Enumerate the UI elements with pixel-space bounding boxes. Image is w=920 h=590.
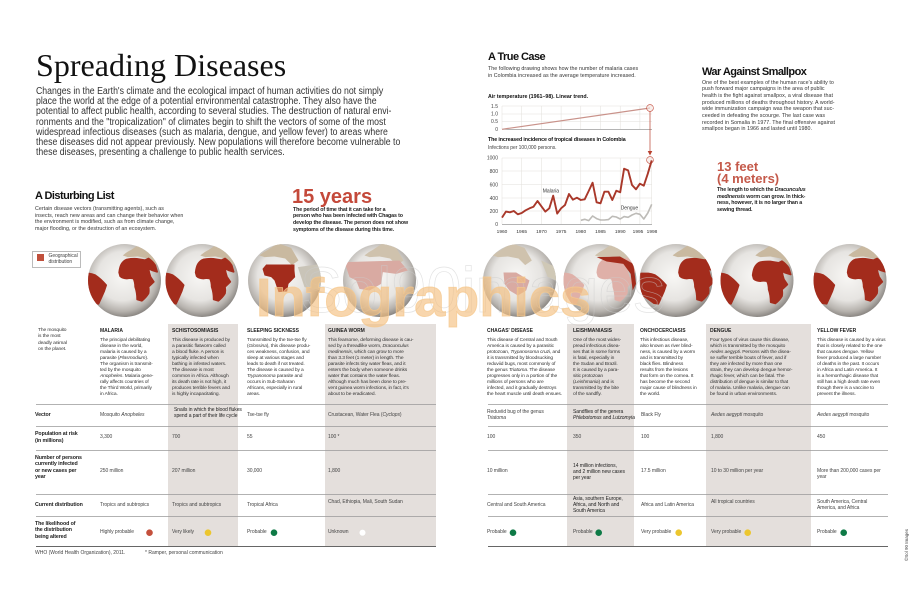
yellow fever infected: More than 200,000 cases per (817, 468, 881, 474)
disease name: SLEEPING SICKNESS (247, 328, 299, 334)
schistosomiasis likelihood: Very likely (172, 529, 194, 535)
description: the genus Triatoma. The disease (487, 368, 555, 373)
description: medinensis, which can grow to more (328, 350, 404, 355)
text: war against smallpox: One of the best examples of the human race's ability to (702, 80, 834, 86)
callout text (717, 187, 806, 213)
chagas vector (487, 409, 544, 421)
description: progresses only in a portion of the (487, 374, 557, 379)
description: the world. (640, 392, 660, 397)
callout figure (717, 159, 779, 186)
description: of the sandfly. (573, 392, 602, 397)
leishmaniasis distribution: Africa, and North and (573, 502, 619, 508)
description: the Third World, primarily (100, 386, 152, 391)
description: Aedes aegypti. Persons with the disea- (710, 350, 791, 355)
disease name: GUINEA WORM (328, 328, 365, 334)
description (710, 338, 792, 397)
row: likelihood values (100, 529, 890, 537)
malaria distribution: Tropics and subtropics (100, 502, 149, 508)
description: common in Africa. Although (172, 374, 229, 379)
sleeping sickness distribution: Tropical Africa (247, 502, 278, 508)
description: about to be eradicated. (328, 392, 376, 397)
description: Anopheles. Malaria gene- (100, 374, 153, 379)
leishmaniasis distribution: Asia, southern Europe, (573, 496, 623, 502)
description: is highly incapacitating. (172, 392, 220, 397)
leishmaniasis infected: per year (573, 475, 591, 481)
description: black flies. Blindness (640, 362, 683, 367)
onchocerciasis likelihood: Very probable (641, 529, 671, 535)
globe: schistosomiasis (166, 244, 238, 317)
description: rally affects countries of (100, 380, 149, 385)
description: Transmitted by the tse-tse fly (247, 338, 307, 343)
disease name: ONCHOCERCIASIS (640, 328, 686, 334)
description: parasite (Plasmodium). (100, 356, 148, 361)
description: leads to death if not treated. (247, 362, 305, 367)
chart: temperature and disease incidence: 1980 (575, 229, 586, 235)
chart title: air temperature: Air temperature (1961–98). Linear trend. (488, 94, 588, 100)
schistosomiasis infected: 207 million (172, 468, 195, 474)
callout text: medinensis worm can grow. In thick- (717, 194, 805, 200)
globe: leishmaniasis (558, 243, 636, 317)
description: se suffer terrible bouts of fever, and if (710, 356, 786, 361)
mosquito note: The mosquito (38, 328, 66, 333)
panel: malaria (100, 328, 154, 397)
description: strain, they can develop dengue hemor- (710, 368, 792, 373)
globe: onchocerciasis (640, 243, 717, 317)
dengue infected: 10 to 30 million per year (711, 468, 763, 474)
chart: temperature and disease incidence: 0.5 (491, 119, 498, 125)
description (817, 338, 886, 397)
row label: vector: Vector (35, 412, 51, 418)
chart: temperature and disease incidence: 1.0 (491, 112, 498, 118)
legend label: distribution (48, 259, 72, 265)
leishmaniasis population: 350 (573, 434, 581, 440)
description: be found in urban environments. (710, 392, 777, 397)
chart: temperature and disease incidence: 600 (490, 182, 498, 188)
intro text: Changes in the Earth's climate and the ecological impact of human activities do not simply (36, 86, 383, 97)
row: population values (100, 434, 890, 442)
description: infected, and it gradually destroys (487, 386, 556, 391)
title: Spreading Diseases (36, 47, 286, 83)
malaria population: 3,300 (100, 434, 112, 440)
intro text (36, 86, 400, 158)
chart: temperature and disease incidence: 1000 (487, 156, 498, 162)
footnote: * Ramper, personal communication (145, 550, 223, 556)
callout text: develop the disease. The person does not show (293, 220, 408, 226)
description: that form on the cornea. It (640, 374, 693, 379)
text: war against smallpox: ceeded in defeating the scourge. The last case was (702, 113, 825, 119)
disease name: MALARIA (100, 328, 123, 334)
description: disease in the world, (100, 344, 142, 349)
globe: chagas disease (483, 243, 556, 317)
description: Africans, especially in rural (247, 386, 302, 391)
chart: temperature and disease incidence: 1985 (595, 229, 606, 235)
panel: guinea worm (328, 328, 414, 397)
yellow fever infected: year (817, 474, 827, 480)
description: occurs in Sub-Saharan (247, 380, 295, 385)
text: war against smallpox: produced millions of deaths throughout history. A world- (702, 100, 835, 106)
description: is a hemorrhagic disease that (817, 374, 878, 379)
description (487, 338, 562, 397)
chart: temperature and disease incidence: 400 (490, 196, 498, 202)
text: a disturbing list (35, 206, 183, 232)
description: typically infected when (172, 356, 219, 361)
malaria infected: 250 million (100, 468, 123, 474)
globes (88, 244, 886, 317)
chart: temperature and disease incidence: 1970 (536, 229, 547, 235)
callout text (293, 206, 408, 233)
guinea worm distribution: Chad, Ethiopia, Mali, South Sudan (328, 499, 403, 505)
description: (Leishmania) and is (573, 380, 614, 385)
description: malaria is caused by a (100, 350, 146, 355)
description (247, 338, 310, 397)
description: that is closely related to the one (817, 344, 882, 349)
callout figure: 13 feet (717, 159, 758, 174)
panel: yellow fever (817, 328, 886, 397)
onchocerciasis infected: 17.5 million (641, 468, 666, 474)
text: a disturbing list: the environment is modified, such as from climate change, (35, 219, 174, 225)
schistosomiasis population: 700 (172, 434, 180, 440)
text: a disturbing list: insects, reach new areas and can change their behavior when (35, 213, 183, 219)
row label: number of persons: or new cases per (35, 468, 76, 474)
description: a blood fluke. A person is (172, 350, 224, 355)
onchocerciasis vector: Black Fly (641, 412, 661, 418)
leishmaniasis distribution: South America (573, 508, 605, 514)
row label: population at risk (35, 431, 78, 444)
description: sed by a threadlike worm, Dracunculus (328, 344, 409, 349)
description: has become the second (640, 380, 690, 385)
description: sitic protozoan (573, 374, 603, 379)
callout figure: 15 years (292, 186, 372, 208)
description: vent guinea worm infections, in fact, it's (328, 386, 409, 391)
schistosomiasis vector (174, 407, 242, 419)
description: protozoan, Trypanosoma cruzi, and (487, 350, 560, 355)
description: still has a high death rate even (817, 380, 880, 385)
description (328, 338, 414, 397)
row label: population at risk: (in millions) (35, 438, 63, 444)
legend swatch (36, 254, 44, 261)
panel: schistosomiasis (172, 328, 230, 397)
mosquito note: deadly animal (38, 341, 67, 346)
description: major cause of blindness in (640, 386, 697, 391)
text: a true case: The following drawing shows how the number of malaria cases (488, 66, 638, 72)
dengue likelihood: Very probable (711, 529, 741, 535)
description: ces weakness, confusion, and (247, 350, 309, 355)
text: war against smallpox: wide immunization campaign was the weapon that suc- (702, 106, 834, 112)
row: infected values (100, 463, 890, 483)
description: ses that in some forms (573, 350, 620, 355)
legend label: Geographical (48, 253, 78, 259)
leishmaniasis distribution (573, 496, 623, 514)
intro text: place the world at the edge of a potential environmental catastrophe. They also have the (36, 96, 377, 107)
globe: sleeping sickness (248, 243, 321, 317)
intro text: these diseases did not appear previously. New populations will therefore become vulnerable to (36, 137, 400, 148)
description: produces terrible fevers and (172, 386, 230, 391)
callout text: The period of time that it can take for a (293, 206, 386, 212)
row label: number of persons: year (35, 474, 46, 480)
description: This disease is caused by a virus (817, 338, 885, 343)
chart: temperature and disease incidence: Dengue (621, 206, 638, 212)
panel: dengue (710, 328, 792, 397)
description: Four types of virus cause this disease, (710, 338, 789, 343)
chart: temperature and disease incidence: 1975 (556, 229, 567, 235)
description: though there is a vaccine to (817, 386, 874, 391)
onchocerciasis distribution: Africa and Latin America (641, 502, 694, 508)
description: enters the body when someone drinks (328, 368, 407, 373)
disease name: LEISHMANIASIS (573, 328, 612, 334)
watermark: Sol90images (300, 254, 665, 326)
text: war against smallpox: smallpox began in 1966 and lasted until 1980. (702, 126, 812, 132)
schistosomiasis distribution: Tropics and subtropics (172, 502, 221, 508)
yellow fever likelihood: Probable (817, 529, 837, 535)
chagas vector: Triatoma (487, 415, 506, 421)
dengue distribution: All tropical countries (711, 499, 755, 505)
globe: malaria (88, 244, 161, 317)
sleeping sickness vector: Tse-tse fly (247, 412, 269, 418)
guinea worm vector: Crustacean, Water Flea (Cyclops) (328, 412, 402, 418)
sleeping sickness population: 55 (247, 434, 252, 440)
description: it is transmitted by bloodsucking (487, 356, 553, 361)
description: ted by the mosquito (100, 368, 141, 373)
description: the Sudan and Brazil. (573, 362, 618, 367)
chagas population: 100 (487, 434, 495, 440)
text: a true case: in Colombia increased as the average temperature increased. (488, 73, 636, 79)
callout text: ness, however, it is no larger than a (717, 200, 802, 206)
legend: geographical distribution (32, 251, 81, 268)
row label: likelihood: The likelihood of (35, 521, 75, 527)
row label: current distribution: Current distribution (35, 502, 83, 508)
description: and is transmitted by (640, 356, 683, 361)
yellow fever population: 450 (817, 434, 825, 440)
chart: temperature and disease incidence: Malaria (543, 188, 559, 194)
text: a disturbing list: major flooding, or the destruction of an ecosystem. (35, 226, 156, 232)
description: the heart muscle until death ensues. (487, 392, 562, 397)
row label: likelihood (35, 521, 76, 540)
description: reduviid bugs, most commonly of (487, 362, 555, 367)
dengue population: 1,800 (711, 434, 723, 440)
panel: chagas disease (487, 328, 562, 397)
description: its death rate is not high, it (172, 380, 226, 385)
yellow fever infected (817, 468, 881, 480)
leishmaniasis vector (573, 409, 635, 421)
description: than 3.3 feet (1 meter) in length. The (328, 356, 404, 361)
text: war against smallpox (702, 80, 835, 132)
chart: temperature and disease incidence: 1998 (647, 229, 658, 235)
globe: dengue (720, 244, 794, 317)
leishmaniasis vector: Sandflies of the genera (573, 409, 623, 415)
description: Although much has been done to pre- (328, 380, 406, 385)
description: transmitted by the bite (573, 386, 619, 391)
description: This fearsome, deforming disease is cau- (328, 338, 413, 343)
description: areas. (247, 392, 260, 397)
description: rhagic fever, which can be fatal. The (710, 374, 785, 379)
chart: temperature and disease incidence: 1960 (497, 229, 508, 235)
chart title: tropical diseases: The increased incidence of tropical diseases in Colombia (488, 136, 626, 142)
yellow fever vector: Aedes aegypti mosquito (817, 412, 869, 418)
description: water that contains the water fleas. (328, 374, 400, 379)
sleeping sickness likelihood: Probable (247, 529, 267, 535)
watermark: Infographics (256, 268, 591, 328)
description: America is caused by a parasitic (487, 344, 554, 349)
disease name: YELLOW FEVER (817, 328, 856, 334)
legend label (48, 253, 78, 265)
intro text: ronments and the "tropicalization" of climates begin to shift the vectors of some of the most (36, 117, 386, 128)
description: parasite infects tiny water fleas, and it (328, 362, 405, 367)
description: This infectious disease, (640, 338, 688, 343)
callout text: The length to which the Dracunculus (717, 187, 806, 193)
description: of malaria. Unlike malaria, dengue can (710, 386, 790, 391)
heading: war against smallpox: War Against Smallpox (702, 66, 806, 78)
description: The disease is caused by a (247, 368, 304, 373)
description: The disease is most (172, 368, 214, 373)
disease name: CHAGAS' DISEASE (487, 328, 533, 334)
globe: yellow fever (809, 243, 887, 317)
description: sleep at various stages and (247, 356, 304, 361)
description: which is transmitted by the mosquito (710, 344, 785, 349)
chart: temperature and disease incidence: 1990 (615, 229, 626, 235)
source note: WHO (World Health Organization), 2011. (35, 550, 125, 556)
row: vector values (100, 407, 870, 421)
panel: onchocerciasis (640, 328, 697, 397)
guinea worm likelihood: Unknown (328, 529, 348, 535)
chagas distribution: Central and South America (487, 502, 546, 508)
disease name: SCHISTOSOMIASIS (172, 328, 218, 334)
chagas vector: Reduviid bug of the genus (487, 409, 544, 415)
sleeping sickness infected: 30,000 (247, 468, 262, 474)
description: of deaths in the past. It occurs (817, 362, 879, 367)
row label: likelihood: being altered (35, 534, 67, 540)
description: results from the lesions (640, 368, 688, 373)
chart: temperature and disease incidence: 0 (495, 127, 498, 133)
schistosomiasis vector: spend a part of their life cycle (174, 413, 237, 419)
description: millions of persons who are (487, 380, 544, 385)
guinea worm population: 100 * (328, 434, 339, 440)
chart: temperature and disease incidence: 1965 (516, 229, 527, 235)
description: fever produced a large number (817, 356, 881, 361)
text: a disturbing list: Certain disease vectors (transmitting agents), such as (35, 206, 164, 212)
mosquito note: is the most (38, 334, 61, 339)
text: war against smallpox: health is the fight against smallpox, a viral disease that (702, 93, 833, 99)
callout figure: (4 meters) (717, 171, 779, 186)
description (100, 338, 154, 397)
description: in Africa and Latin America. It (817, 368, 877, 373)
description: they are infected by more than one (710, 362, 782, 367)
malaria vector: Mosquito Anopheles (100, 412, 144, 418)
leishmaniasis infected (573, 463, 625, 481)
schistosomiasis vector: Snails in which the blood flukes (174, 407, 242, 413)
globe: guinea worm (343, 243, 416, 317)
malaria likelihood: Highly probable (100, 529, 134, 535)
yellow fever distribution: America, and Africa (817, 505, 859, 511)
description: in Africa. (100, 392, 118, 397)
description: (Glossina), this disease produ- (247, 344, 310, 349)
description (172, 338, 230, 397)
row label: number of persons (35, 455, 82, 480)
onchocerciasis population: 100 (641, 434, 649, 440)
description: The organism is transmit- (100, 362, 153, 367)
callout text: symptoms of the disease during this time. (293, 227, 394, 233)
description: a parasitic flatworm called (172, 344, 226, 349)
text: war against smallpox: push forward major campaigns in the area of public (702, 86, 825, 92)
credit: ©Sol 90 Images (904, 529, 909, 561)
description: One of the most wides- (573, 338, 621, 343)
description: ness, is caused by a worm (640, 350, 695, 355)
text: a true case (488, 66, 638, 79)
description: also known as river blind- (640, 344, 693, 349)
callout text: person who has been infected with Chagas to (293, 213, 403, 219)
chart: temperature and disease incidence: 200 (490, 209, 498, 215)
description: prevent the illness. (817, 392, 856, 397)
intro text: potential to affect public health, according to several studies. The destruction of natural envi- (36, 106, 391, 117)
description: that causes dengue. Yellow (817, 350, 874, 355)
chart: temperature and disease incidence: 1.5 (491, 104, 498, 110)
description: It is caused by a para- (573, 368, 619, 373)
description: The principal debilitating (100, 338, 150, 343)
chagas infected: 10 million (487, 468, 508, 474)
chart: temperature and disease incidence: 1995 (633, 229, 644, 235)
callout text: sewing thread. (717, 207, 752, 213)
description (640, 338, 697, 397)
chart: temperature and disease incidence: 800 (490, 169, 498, 175)
mosquito note: on the planet. (38, 347, 66, 352)
disease name: DENGUE (710, 328, 731, 334)
yellow fever distribution: South America, Central (817, 499, 867, 505)
description: distribution of dengue is similar to that (710, 380, 788, 385)
description: This disease of Central and South (487, 338, 557, 343)
leishmaniasis infected: 14 million infections, (573, 463, 617, 469)
description: pread infectious disea- (573, 344, 620, 349)
intro text: widespread infectious diseases (such as malaria, dengue, and yellow fever) to areas where (36, 127, 388, 138)
row label: likelihood: the distribution (35, 527, 72, 533)
description: is fatal, especially in (573, 356, 614, 361)
dengue vector: Aedes aegypti mosquito (711, 412, 763, 418)
chart: temperature and disease incidence: 0 (495, 222, 498, 228)
row label: number of persons: currently infected (35, 461, 78, 467)
chagas likelihood: Probable (487, 529, 507, 535)
panel: leishmaniasis (573, 328, 621, 397)
row label: population at risk: Population at risk (35, 431, 78, 437)
description: Trypanosoma parasite and (247, 374, 302, 379)
callout: 13 feet (717, 159, 806, 213)
leishmaniasis vector: Phlebotomus and Lutzomyia (573, 415, 635, 421)
row: distribution values (100, 496, 890, 516)
leishmaniasis likelihood: Probable (573, 529, 593, 535)
guinea worm infected: 1,800 (328, 468, 340, 474)
leishmaniasis infected: and 2 million new cases (573, 469, 625, 475)
callout: 15 years (292, 186, 408, 233)
mosquito note (38, 328, 67, 352)
chart subtitle: Infections per 100,000 persons. (488, 145, 556, 151)
description: bathing in infested waters. (172, 362, 226, 367)
row label: number of persons: Number of persons (35, 455, 82, 461)
panel: sleeping sickness (247, 328, 310, 397)
intro text: these diseases, presenting a challenge to public health services. (36, 147, 285, 158)
description: This disease is produced by (172, 338, 230, 343)
heading: a true case: A True Case (488, 51, 545, 63)
text: war against smallpox: recorded in Somalia in 1977. The final offensive against (702, 120, 835, 126)
heading: a disturbing list: A Disturbing List (35, 190, 114, 202)
yellow fever distribution (817, 499, 867, 511)
description (573, 338, 621, 397)
